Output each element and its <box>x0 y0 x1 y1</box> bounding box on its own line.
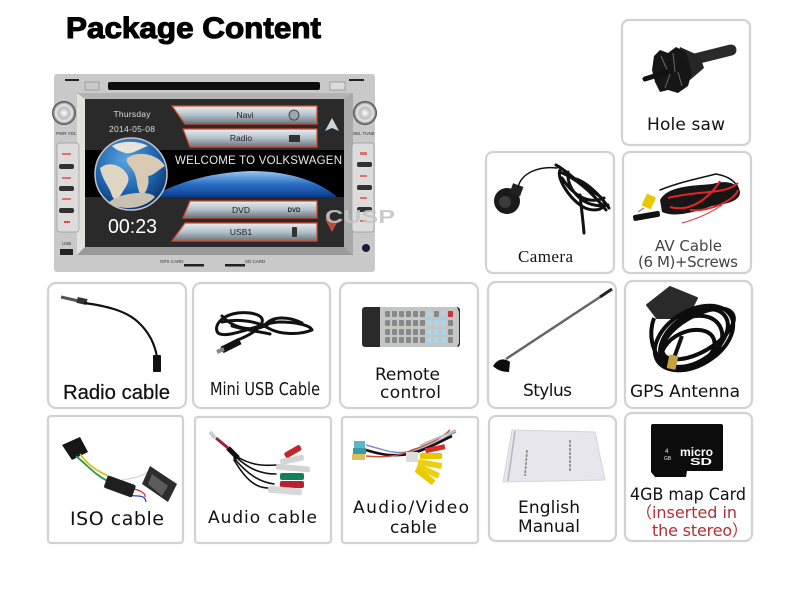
small stereo captions: PWR VOL <box>56 131 77 136</box>
title: Package Content <box>66 12 321 45</box>
panel: ISO cable <box>48 416 183 543</box>
label: Stylus <box>523 381 572 401</box>
icon: micro SD card: 4 <box>665 449 669 455</box>
panel: hole saw <box>622 20 750 145</box>
icon: radio cable <box>61 297 161 372</box>
clock: 00:23 <box>108 216 157 238</box>
welcome text: WELCOME TO VOLKSWAGEN <box>175 155 342 167</box>
navigation arrows <box>325 118 339 232</box>
label line 1: AV Cable <box>655 237 722 255</box>
panel: camera <box>486 152 614 273</box>
volume knobs <box>52 101 377 125</box>
small stereo captions: SD CARD <box>245 259 266 264</box>
icon: hole saw <box>645 47 731 93</box>
screen <box>85 99 344 247</box>
note line 1: （inserted in <box>636 503 737 522</box>
label: GPS Antenna <box>630 382 740 402</box>
label line 2: Manual <box>518 517 580 537</box>
menu buttons: DVD <box>232 205 250 215</box>
menu buttons <box>172 106 317 241</box>
menu buttons: Radio <box>230 133 252 143</box>
globe <box>95 138 167 210</box>
label line 1: English <box>518 498 580 518</box>
watermark: CUSP <box>325 207 395 227</box>
icon: audio cable <box>210 432 310 496</box>
small stereo captions: GPS CARD <box>160 259 184 264</box>
icon: audio/video cable <box>352 430 456 485</box>
note line 2: the stereo） <box>652 521 748 540</box>
panel: radio cable <box>48 283 186 408</box>
earth horizon <box>150 171 337 197</box>
icon: micro SD card: SD <box>690 457 712 468</box>
icon: manual booklet <box>503 430 605 482</box>
panel: AV cable <box>623 152 751 273</box>
label line 1: Audio/Video <box>353 498 469 518</box>
panel: 4GB map card <box>625 413 752 541</box>
small stereo captions: SEL TUNE <box>353 131 375 136</box>
label line 1: Remote <box>375 365 440 385</box>
icon: remote control <box>362 307 460 347</box>
icon: micro SD card: GB <box>664 456 672 462</box>
label: Hole saw <box>647 115 725 135</box>
panel: GPS antenna <box>625 281 752 408</box>
icon: camera <box>494 165 609 233</box>
panel: English manual <box>489 416 616 541</box>
label: Radio cable <box>63 382 170 404</box>
label: 4GB map Card <box>630 485 746 505</box>
small stereo captions: USB <box>62 241 71 246</box>
head unit stereo <box>52 74 395 272</box>
icon: micro SD card <box>651 424 723 477</box>
label: ISO cable <box>70 508 164 530</box>
icon: GPS antenna <box>643 287 745 384</box>
panel: mini USB cable <box>193 283 330 408</box>
panel: audio/video cable <box>342 417 478 543</box>
panel: remote control <box>340 283 478 408</box>
icon: stylus <box>493 289 612 372</box>
menu buttons: DVD <box>288 208 301 214</box>
panel: audio cable <box>195 417 331 543</box>
icon: ISO cable <box>62 437 177 502</box>
CD slot <box>108 82 320 90</box>
label: Mini USB Cable <box>210 379 320 400</box>
label: Camera <box>518 247 573 266</box>
icon: AV cable and screws <box>633 174 740 223</box>
side button panels <box>57 143 374 232</box>
label line 2: control <box>380 383 441 403</box>
panel: stylus <box>488 282 616 408</box>
menu buttons: Navi <box>236 110 254 120</box>
date text: Thursday <box>114 109 151 119</box>
small stereo captions <box>56 131 375 266</box>
label line 2: (6 M)+Screws <box>638 253 738 271</box>
label: Audio cable <box>208 508 317 528</box>
menu buttons: USB1 <box>230 227 252 237</box>
label line 2: cable <box>390 518 437 538</box>
icon: micro SD card: micro <box>680 445 713 459</box>
icon: mini USB cable <box>217 313 312 352</box>
screen: 2014-05-08 <box>109 124 155 134</box>
